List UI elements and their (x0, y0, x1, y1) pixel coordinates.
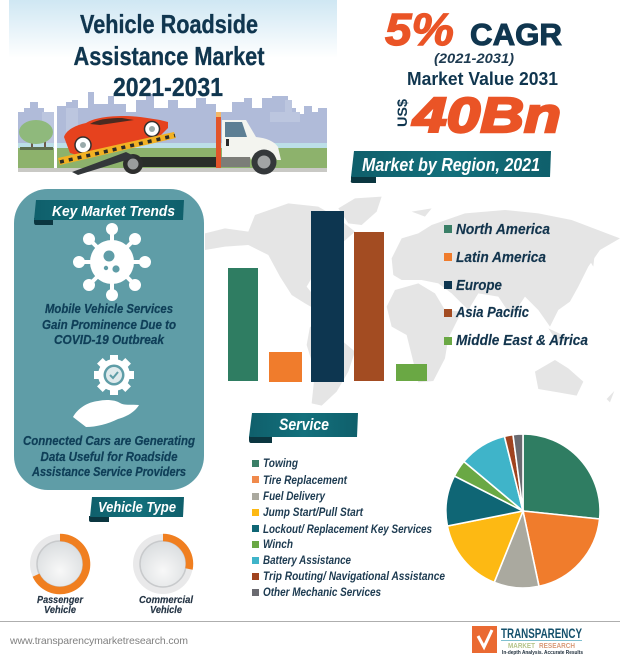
trend text: mobile services: COVID-19 Outbreak (54, 333, 165, 347)
heading: vehicle type (89, 497, 184, 522)
heading: market by region: Market by Region, 2021 (362, 154, 540, 175)
pie chart: service (446, 434, 600, 588)
logo: transparency market research: RESEARCH (539, 641, 575, 650)
legend: regions: Middle East & Africa (456, 332, 588, 349)
legend: regions: Asia Pacific (455, 304, 530, 321)
stat: CAGR (385, 4, 562, 66)
label: passenger vehicle: Passenger (37, 595, 84, 606)
white pole (54, 105, 57, 168)
legend: services: Battery Assistance (263, 555, 352, 567)
legend: regions: Latin America (456, 249, 546, 266)
logo: transparency market research: MARKET (508, 641, 535, 650)
heading: service: Service (279, 415, 329, 434)
hazard bed (58, 132, 176, 165)
grass (18, 148, 327, 169)
icon: virus (75, 225, 149, 299)
legend: regions (444, 221, 588, 349)
road (18, 168, 327, 172)
website url: www.transparencymarketresearch.com (9, 635, 188, 647)
label: commercial vehicle: Commercial (139, 595, 193, 606)
foreground buildings (42, 100, 300, 147)
skyline (18, 92, 327, 148)
legend: services: Fuel Delivery (263, 491, 326, 503)
red car (64, 116, 168, 156)
trend text: mobile services: Mobile Vehicle Services (45, 302, 173, 316)
legend: services: Trip Routing/ Navigational Assistance (263, 571, 446, 583)
trend text: connected cars: Connected Cars are Generating (23, 434, 195, 448)
tree (19, 120, 53, 150)
stat: market value: US$ (394, 99, 410, 127)
label: commercial vehicle (139, 595, 193, 616)
stat: market value: 40Bn (412, 89, 561, 143)
icon: gear over hand (73, 355, 139, 427)
donut: commercial vehicle (133, 534, 193, 594)
legend: services: Other Mechanic Services (263, 587, 381, 599)
legend: services: Jump Start/Pull Start (263, 507, 364, 519)
heading: vehicle type: Vehicle Type (98, 500, 176, 516)
rear wheel (123, 154, 143, 174)
stat: CAGR: (2021-2031) (434, 50, 514, 66)
title: Vehicle Roadside (80, 9, 258, 39)
label: passenger vehicle: Vehicle (44, 605, 76, 616)
trend text: mobile services (42, 302, 176, 347)
heading: key market trends (34, 200, 184, 225)
title (74, 9, 265, 102)
trend text: connected cars: Data Useful for Roadside (40, 450, 178, 464)
stat: market value: Market Value 2031 (407, 68, 558, 89)
label: commercial vehicle: Vehicle (150, 605, 182, 616)
stat: CAGR: 5% (385, 4, 454, 55)
legend: services (252, 458, 446, 599)
heading: key market trends: Key Market Trends (52, 203, 175, 220)
panel: key market trends (14, 189, 204, 490)
bar chart: market by region (228, 211, 427, 382)
heading: service (249, 413, 358, 443)
trend text: mobile services: Gain Prominence Due to (42, 318, 176, 332)
donut: passenger vehicle (30, 534, 90, 594)
legend: regions: North America (456, 221, 550, 238)
legend: regions: Europe (456, 277, 502, 294)
logo: transparency market research (472, 626, 583, 656)
legend: services: Towing (263, 458, 298, 470)
river (18, 143, 327, 149)
title: Assistance Market (74, 41, 265, 71)
stat: CAGR: CAGR (470, 17, 562, 52)
trend text: connected cars: Assistance Service Providers (31, 465, 186, 479)
truck cab (216, 112, 281, 168)
header illustration (9, 0, 337, 175)
trend text: connected cars (23, 434, 195, 479)
title: 2021-2031 (113, 72, 223, 102)
legend: services: Lockout/ Replacement Key Services (263, 524, 432, 536)
stat: market value (394, 68, 561, 143)
tow ramp arm (72, 152, 136, 175)
legend: services: Tire Replacement (263, 475, 348, 487)
logo: transparency market research: In-depth Analysis. Accurate Results (502, 650, 583, 656)
label: passenger vehicle (37, 595, 84, 616)
heading: market by region (351, 151, 551, 183)
truck chassis (125, 157, 217, 167)
logo: transparency market research: TRANSPARENCY (501, 626, 582, 641)
front wheel (252, 150, 276, 174)
world map background (205, 197, 620, 406)
legend: services: Winch (263, 539, 293, 551)
